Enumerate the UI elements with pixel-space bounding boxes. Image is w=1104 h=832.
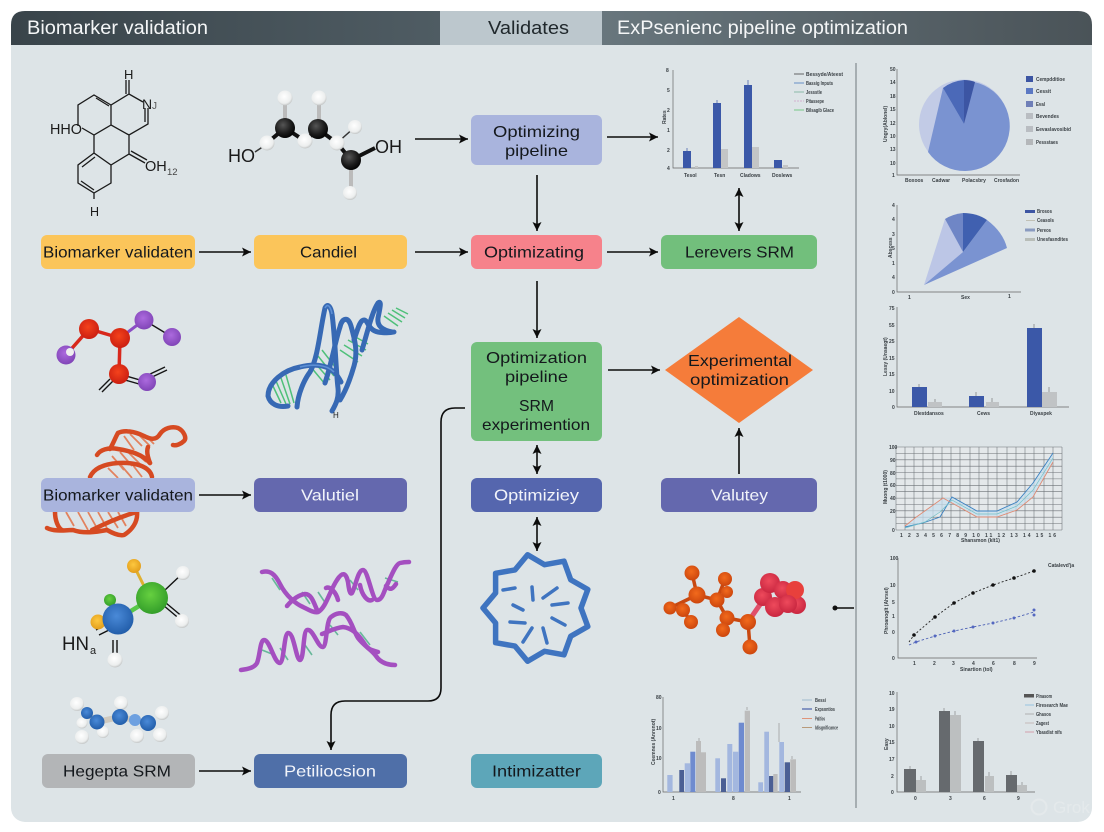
arrow: Optimiziey and ring — [536, 517, 538, 551]
chart: top bar chart: Jessstle — [806, 90, 822, 96]
flow box: Optimizing pipeline: pipeline — [505, 143, 568, 160]
icon: ball and stick molecule black and white: OH — [375, 137, 402, 157]
chart: bottom right bar chart: 10 — [889, 724, 895, 730]
chart: top bar chart: Tesol — [684, 173, 697, 179]
chart: pie chart: Cempdditioe — [1036, 77, 1065, 83]
flow box: Optimiziey — [471, 478, 602, 512]
flow box: Optimizating: Optimizating — [484, 244, 584, 262]
chart: bottom right bar chart: 0 — [891, 790, 894, 796]
chart: gridded line chart: 60 — [890, 483, 896, 489]
chart: scatter line chart: Catalevd'ja — [1048, 563, 1074, 569]
chart: scatter line chart: 1 — [913, 661, 916, 667]
chart: middle bar chart: 15 — [889, 372, 895, 378]
flow box: Intimizatter — [471, 754, 602, 788]
chart: fan chart: 0 — [892, 290, 895, 296]
arrow: Valutey up to diamond — [738, 428, 740, 474]
chart: pie chart: Eevaslavosibid — [1036, 127, 1071, 133]
chart: scatter line chart: 10 — [890, 583, 896, 589]
header title left: Biomarker validation — [27, 18, 208, 39]
chart: middle bar chart: Dlestdansos — [914, 411, 944, 417]
flow box: Optimization pipeline SRM experimention — [471, 342, 602, 441]
chart: bottom right bar chart: 6 — [983, 796, 986, 802]
chart: top bar chart: 2 — [667, 148, 670, 154]
right column divider — [855, 63, 857, 808]
chart: pie chart: 18 — [890, 94, 896, 100]
icon: skeletal molecule: OH — [145, 159, 167, 175]
chart: scatter line chart: 100 — [890, 556, 899, 562]
flow box: Lerevers SRM — [661, 235, 817, 269]
arrow: Hegepta to Petiliocsion — [199, 770, 251, 772]
icon: red purple molecule — [56, 310, 181, 392]
flow box: Optimizing pipeline: Optimizing — [493, 124, 580, 141]
chart: bottom right bar chart: 15 — [889, 740, 895, 746]
chart: gridded line chart: 20 — [890, 509, 896, 515]
flow box: Valutey: Valutey — [711, 488, 768, 504]
chart: middle bar chart: 55 — [889, 323, 895, 329]
chart: pie chart: 10 — [890, 134, 896, 140]
icon: skeletal molecule — [50, 67, 178, 219]
chart: pie chart: Ungry(Ablonel) — [883, 106, 889, 142]
chart: scatter line chart: 6 — [992, 661, 995, 667]
chart: gridded line chart: 80 — [890, 471, 896, 477]
chart: middle bar chart: Cews — [977, 411, 990, 417]
flow box: Optimization pipeline SRM experimention: experimention — [482, 417, 590, 434]
chart: top bar chart: 1 — [667, 128, 670, 134]
chart: fan chart: 4 — [892, 275, 895, 281]
flow box: Optimiziey: Optimiziey — [494, 488, 579, 504]
arrow: Biomarker to Valutiel — [199, 494, 251, 496]
arrow: pipeline and Optimiziey — [536, 445, 538, 474]
flow box: Biomarker validaten yellow: Biomarker validaten — [43, 244, 193, 262]
flow box: Biomarker validaten lilac — [41, 478, 195, 512]
chart: pie chart: 15 — [890, 107, 896, 113]
chart: fan chart: 3 — [892, 232, 895, 238]
arrow: molecule to optimizing pipeline — [415, 138, 468, 140]
chart: pie chart: Bevendes — [1036, 114, 1059, 120]
chart: scatter line chart: 0 — [892, 630, 895, 636]
chart: fan chart: Ceasols — [1037, 218, 1054, 224]
flow box: Valutiel: Valutiel — [301, 488, 359, 504]
chart: top bar chart: Rates — [662, 110, 668, 124]
chart: grouped bar chart: Bessi — [815, 698, 827, 704]
chart: bottom right bar chart: Ybasdist nifs — [1036, 730, 1062, 736]
chart: middle bar chart: 75 — [889, 306, 895, 312]
chart: bottom right bar chart: 10 — [889, 691, 895, 697]
chart: fan chart: 4 — [892, 203, 895, 209]
chart: scatter line chart: 5 — [892, 600, 895, 606]
chart: scatter line chart — [884, 556, 1074, 673]
chart: top bar chart: Pitassepe — [806, 99, 824, 105]
flow box: Lerevers SRM: Lerevers SRM — [685, 244, 794, 262]
chart: bottom right bar chart — [884, 691, 1068, 802]
icon: blue white small molecule — [70, 696, 169, 744]
icon: green blue molecule: a — [90, 645, 97, 657]
flow box: Hegepta SRM: Hegepta SRM — [63, 764, 171, 780]
icon: skeletal molecule: N — [142, 96, 152, 112]
decision diamond: Experimental optimization: Experimental — [688, 353, 792, 370]
chart: pie chart: Pessstaes — [1036, 140, 1058, 146]
chart: gridded line chart: 1 2 3 4 5 6 7 8 9 10 11 12 13 14 15 16 — [900, 533, 1056, 539]
chart: scatter line chart: 3 — [952, 661, 955, 667]
chart: top bar chart: Bassig Inputs — [806, 81, 833, 87]
arrow: long connector to Petiliocsion — [331, 408, 465, 750]
flow box: Candiel: Candiel — [300, 244, 357, 262]
chart: gridded line chart — [883, 445, 1062, 544]
chart: grouped bar chart: 80 — [656, 695, 662, 701]
chart: pie chart — [883, 67, 1071, 184]
flow box: Hegepta SRM — [42, 754, 195, 788]
chart: grouped bar chart: 1 — [788, 796, 791, 802]
chart: fan chart — [888, 203, 1068, 301]
flow box: Biomarker validaten lilac: Biomarker validaten — [43, 488, 193, 504]
decision diamond: Experimental optimization — [665, 317, 813, 423]
icon: orange red molecule — [664, 566, 806, 654]
chart: bottom right bar chart: Ghasos — [1036, 712, 1051, 718]
chart: middle bar chart: 25 — [889, 339, 895, 345]
chart: pie chart: 13 — [890, 147, 896, 153]
chart: grouped bar chart: 1 — [672, 796, 675, 802]
chart: top bar chart: Bilsagib Glace — [806, 108, 834, 114]
chart: bottom right bar chart: 19 — [889, 707, 895, 713]
chart: top bar chart: Tesn — [714, 173, 725, 179]
decision diamond: Experimental optimization: optimization — [690, 372, 789, 389]
arrow: chart and Lerevers SRM — [738, 188, 740, 231]
icon: skeletal molecule: H — [124, 67, 133, 82]
arrow: Optimizating down — [536, 281, 538, 338]
watermark — [1032, 798, 1090, 817]
chart: fan chart: Pereos — [1037, 228, 1051, 234]
chart: grouped bar chart: 8 — [732, 796, 735, 802]
chart: grouped bar chart: Ceemnes (Anrenot) — [651, 719, 657, 765]
chart: fan chart: Abscess — [888, 237, 894, 258]
chart: top bar chart: Cladows — [740, 173, 761, 179]
chart: grouped bar chart: 10 — [656, 756, 662, 762]
chart: top bar chart — [662, 68, 843, 179]
chart: bottom right bar chart: 2 — [891, 774, 894, 780]
chart: fan chart: 1 — [892, 261, 895, 267]
chart: bottom right bar chart: 9 — [1017, 796, 1020, 802]
chart: bottom right bar chart: Easy — [884, 738, 890, 750]
header title center: Validates — [488, 17, 569, 38]
flow box: Optimization pipeline SRM experimention: Optimization — [486, 350, 587, 367]
chart: bottom right bar chart: 3 — [949, 796, 952, 802]
chart: gridded line chart: Muong (t1000) — [883, 470, 889, 504]
chart: pie chart: 10 — [890, 161, 896, 167]
chart: fan chart: Sex — [961, 295, 970, 301]
chart: grouped bar chart: 10 — [656, 726, 662, 732]
chart: bottom right bar chart: 0 — [914, 796, 917, 802]
icon: purple DNA double helix — [241, 562, 409, 670]
arrow: Candiel to Optimizating — [415, 251, 468, 253]
chart: top bar chart: 5 — [667, 88, 670, 94]
flow box: Petiliocsion: Petiliocsion — [284, 764, 376, 780]
icon: blue DNA helix: H — [333, 411, 339, 420]
chart: middle bar chart: Diyaspek — [1030, 411, 1052, 417]
arrow: Biomarker to Candiel — [199, 251, 251, 253]
chart: gridded line chart: 90 — [890, 458, 896, 464]
arrow: pipeline to diamond — [608, 369, 660, 371]
chart: fan chart: 1 — [1008, 294, 1011, 300]
flow box: Optimization pipeline SRM experimention: SRM — [519, 398, 554, 415]
flow arrows — [199, 137, 854, 771]
icon: red DNA helix — [47, 427, 185, 535]
chart: middle bar chart: Lessy (Unsaegt) — [883, 337, 889, 376]
chart: bottom right bar chart: 17 — [889, 757, 895, 763]
flow box: Optimizing pipeline — [471, 115, 602, 165]
icon: skeletal molecule: H — [90, 205, 99, 219]
chart: gridded line chart: Shansmon (klt1) — [961, 538, 1000, 544]
chart: scatter line chart: 1 — [892, 614, 895, 620]
chart: pie chart: Polacsbry — [962, 178, 986, 184]
flow box: Optimizating — [471, 235, 602, 269]
chart: grouped bar chart: 0 — [658, 790, 661, 796]
chart: fan chart: 4 — [892, 217, 895, 223]
icon: skeletal molecule: J — [152, 101, 157, 112]
chart: pie chart: Cessit — [1036, 89, 1051, 95]
chart: grouped bar chart: Idisgnificance — [815, 726, 838, 732]
chart: gridded line chart: 40 — [890, 496, 896, 502]
flow box: Candiel — [254, 235, 407, 269]
arrow: optimizing pipeline down — [536, 175, 538, 231]
connector: dot to divider — [832, 606, 854, 610]
flow box: Biomarker validaten yellow — [41, 235, 195, 269]
icon: ball and stick molecule black and white: HO — [228, 146, 255, 166]
chart: grouped bar chart — [651, 695, 838, 802]
watermark: Grok — [1053, 798, 1090, 817]
icon: ball and stick molecule black and white — [228, 90, 402, 200]
header title right: ExPsenienc pipeline optimization — [617, 18, 908, 39]
chart: grouped bar chart: Expsontios — [815, 707, 835, 713]
arrow: optimizing pipeline to chart — [607, 136, 658, 138]
chart: scatter line chart: 8 — [1013, 661, 1016, 667]
icon: skeletal molecule: 12 — [167, 167, 178, 178]
icon: blue DNA helix — [268, 302, 408, 420]
chart: pie chart: 14 — [890, 80, 896, 86]
chart: pie chart: 50 — [890, 67, 896, 73]
chart: bottom right bar chart: Firesearch Mae — [1036, 703, 1068, 709]
flow box: Valutiel — [254, 478, 407, 512]
chart: scatter line chart: 0 — [892, 656, 895, 662]
chart: pie chart: 1 — [892, 173, 895, 179]
flow box: Valutey — [661, 478, 817, 512]
header bar — [11, 11, 1092, 45]
chart: bottom right bar chart: Zagest — [1036, 721, 1049, 727]
flow box: Optimization pipeline SRM experimention: pipeline — [505, 369, 568, 386]
chart: fan chart: Unesfasndites — [1037, 237, 1068, 243]
chart: top bar chart: Bessyde/Ateest — [806, 72, 843, 78]
chart: pie chart: Boxoos — [905, 178, 924, 184]
icon: skeletal molecule: HHO — [50, 122, 82, 138]
chart: pie chart: 12 — [890, 121, 896, 127]
chart: middle bar chart: 0 — [892, 405, 895, 411]
chart: scatter line chart: 9 — [1033, 661, 1036, 667]
chart: gridded line chart: 100 — [889, 445, 898, 451]
flow box: Intimizatter: Intimizatter — [492, 764, 582, 780]
chart: fan chart: 5 — [892, 246, 895, 252]
chart: pie chart: Crosfadon — [994, 178, 1019, 184]
chart: fan chart: 1 — [908, 295, 911, 301]
chart: top bar chart: 2 — [667, 108, 670, 114]
chart: middle bar chart: 10 — [889, 389, 895, 395]
chart: top bar chart: Doslews — [772, 173, 793, 179]
chart: scatter line chart: 4 — [972, 661, 975, 667]
chart: bottom right bar chart: Pinasom — [1036, 694, 1052, 700]
chart: pie chart: Eval — [1036, 102, 1046, 108]
arrow: Optimizating to Lerevers SRM — [607, 251, 658, 253]
chart: top bar chart: 8 — [666, 68, 669, 74]
chart: scatter line chart: Phroanoglt (Ahrsel) — [884, 587, 890, 634]
chart: scatter line chart: 2 — [933, 661, 936, 667]
chart: fan chart: Brosos — [1037, 209, 1052, 215]
chart: middle bar chart — [883, 306, 1069, 417]
chart: scatter line chart: Sinartion (tol) — [960, 667, 993, 673]
icon: blue ring protein — [483, 555, 588, 661]
icon: green blue molecule: HN — [62, 634, 89, 655]
icon: green blue molecule — [62, 559, 190, 668]
chart: middle bar chart: 15 — [889, 356, 895, 362]
chart: gridded line chart: 0 — [892, 528, 895, 534]
chart: pie chart: Cadwar — [932, 178, 950, 184]
flow box: Petiliocsion — [254, 754, 407, 788]
chart: top bar chart: 4 — [667, 166, 670, 172]
chart: grouped bar chart: Patitios — [815, 716, 825, 722]
